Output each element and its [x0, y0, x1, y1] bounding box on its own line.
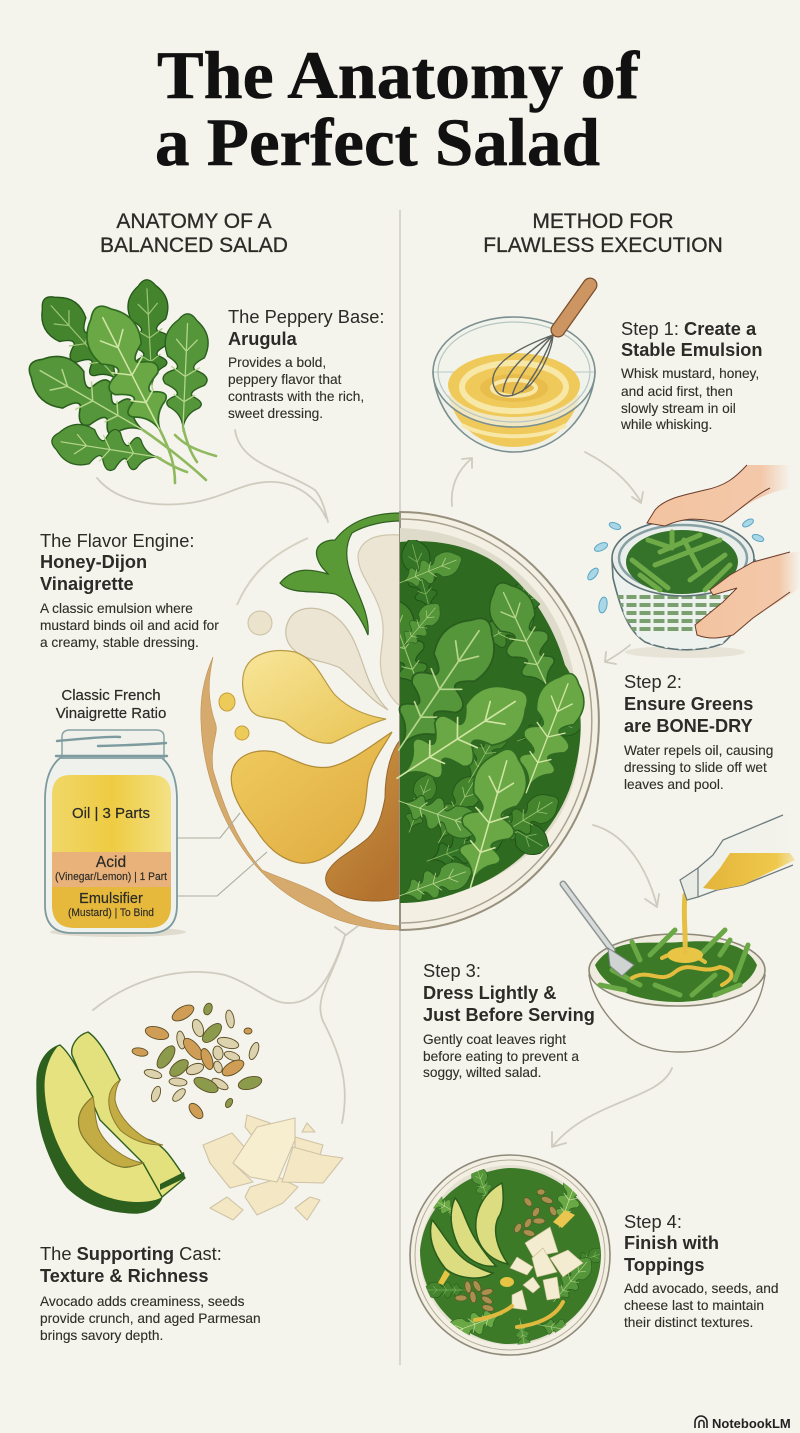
text: the flavor engine: Honey-Dijon: [40, 552, 147, 572]
arrow: bowl to spinner: [585, 452, 643, 503]
heading: method column: [483, 210, 723, 257]
jar layer: emulsifier: [52, 887, 171, 928]
text: step 1: [620, 318, 762, 432]
arrow: toppings to plate: [93, 926, 358, 1123]
arrow: arugula to plate: [97, 430, 328, 522]
text: step 3: before eating to prevent a: [423, 1049, 579, 1064]
fork: [563, 884, 634, 976]
arrow: plate to bowl: [452, 458, 472, 506]
toppings: parmesan: [510, 1227, 583, 1310]
text: the peppery base: [228, 306, 384, 421]
notebooklm logo: NotebookLM: [712, 1416, 791, 1431]
text: the peppery base: Arugula: [228, 329, 298, 349]
title: a Perfect Salad: [155, 104, 600, 180]
jar layer: acid: [52, 852, 171, 887]
text: the peppery base: The Peppery Base:: [228, 306, 384, 327]
toppings: seeds: [455, 1189, 558, 1312]
text: step 1: Stable Emulsion: [621, 340, 762, 360]
text: step 2: dressing to slide off wet: [624, 760, 767, 775]
text: step 2: leaves and pool.: [624, 777, 724, 792]
text: the peppery base: Provides a bold,: [228, 355, 326, 370]
icon: salad spinner with hands: [586, 465, 800, 658]
toppings: avocado: [431, 1183, 508, 1278]
text: step 4: [624, 1211, 778, 1330]
text: step 3: Gently coat leaves right: [423, 1032, 566, 1047]
jar title: Classic French: [61, 687, 161, 704]
text: step 1: Step 1: Create a: [621, 318, 757, 339]
jar layer: oil: [52, 775, 171, 852]
heading: anatomy column: [100, 210, 288, 257]
jar title: [56, 687, 166, 722]
icon: whisk in dressing bowl: [433, 285, 595, 452]
plate: dressing half: [201, 513, 400, 930]
text: step 4: Step 4:: [624, 1211, 682, 1232]
icon: arugula bunch: [18, 279, 216, 483]
text: step 1: while whisking.: [620, 417, 712, 432]
central plate: [201, 512, 599, 930]
text: step 2: Ensure Greens: [624, 694, 753, 714]
text: step 2: Step 2:: [624, 671, 682, 692]
text: step 4: their distinct textures.: [624, 1315, 753, 1330]
text: the supporting cast: provide crunch, and aged Parmesan: [40, 1311, 261, 1326]
text: the supporting cast: brings savory depth.: [40, 1328, 163, 1343]
connectors: jar to plate: [165, 813, 267, 896]
text: step 4: Finish with: [624, 1233, 719, 1253]
text: the supporting cast: Texture & Richness: [40, 1266, 208, 1286]
text: the flavor engine: The Flavor Engine:: [40, 530, 194, 551]
text: the flavor engine: a creamy, stable dressing.: [40, 635, 199, 650]
whisk: [493, 285, 590, 396]
text: step 4: Toppings: [624, 1255, 704, 1275]
text: the flavor engine: Vinaigrette: [40, 574, 134, 594]
icon: dressed salad bowl: [563, 808, 800, 1052]
icon: seeds: [131, 1002, 263, 1121]
hands: [647, 465, 790, 526]
text: step 3: soggy, wilted salad.: [423, 1065, 541, 1080]
heading: method column: FLAWLESS EXECUTION: [483, 234, 723, 257]
icon: avocado slices: [37, 1032, 185, 1213]
vinaigrette ratio jar: Acid: [96, 854, 126, 871]
text: the supporting cast: The Supporting Cast:: [40, 1243, 222, 1264]
text: step 3: Step 3:: [423, 960, 481, 981]
icon: parmesan shards: [203, 1115, 343, 1220]
text: step 2: Water repels oil, causing: [624, 743, 773, 758]
text: the flavor engine: mustard binds oil and acid for: [40, 618, 219, 633]
text: the peppery base: contrasts with the rich,: [228, 389, 364, 404]
vinaigrette ratio jar: (Mustard) | To Bind: [68, 907, 154, 919]
text: the supporting cast: [40, 1243, 261, 1343]
plate: arugula half: [396, 511, 600, 931]
text: the flavor engine: [40, 530, 219, 650]
toppings: dressing: [475, 1302, 563, 1327]
text: the supporting cast: Avocado adds creaminess, seeds: [40, 1294, 245, 1309]
text: step 1: slowly stream in oil: [621, 401, 736, 416]
text: step 1: and acid first, then: [621, 384, 733, 399]
vinaigrette ratio jar: Oil | 3 Parts: [72, 805, 150, 822]
jar title: Vinaigrette Ratio: [56, 705, 166, 722]
text: step 2: [624, 671, 773, 792]
vinaigrette ratio jar: [45, 730, 186, 937]
text: step 4: Add avocado, seeds, and: [624, 1281, 778, 1296]
heading: anatomy column: BALANCED SALAD: [100, 234, 288, 257]
text: the peppery base: peppery flavor that: [228, 372, 342, 387]
water drops: [586, 517, 765, 614]
arrow: step 2 to dressing: [593, 825, 659, 907]
vinaigrette ratio jar: Emulsifier: [79, 891, 143, 907]
vinaigrette ratio jar: (Vinegar/Lemon) | 1 Part: [55, 871, 167, 883]
text: step 3: Dress Lightly &: [423, 983, 556, 1003]
text: step 2: are BONE-DRY: [624, 716, 753, 736]
heading: method column: METHOD FOR: [532, 210, 674, 233]
icon: finished salad with toppings: [410, 1155, 610, 1355]
text: step 3: Just Before Serving: [423, 1005, 595, 1025]
text: step 4: cheese last to maintain: [624, 1298, 764, 1313]
arrow: bowl to toppings: [552, 1068, 672, 1147]
title: [155, 37, 640, 180]
arrow: spinner to step 2: [605, 645, 630, 664]
title: The Anatomy of: [157, 37, 640, 113]
text: step 3: [423, 960, 595, 1080]
oil stream: [682, 895, 688, 952]
text: step 1: Whisk mustard, honey,: [621, 366, 759, 381]
text: the flavor engine: A classic emulsion where: [40, 601, 193, 616]
text: the peppery base: sweet dressing.: [228, 406, 323, 421]
icon: oil bottle pouring: [680, 808, 800, 900]
heading: anatomy column: ANATOMY OF A: [116, 210, 272, 233]
